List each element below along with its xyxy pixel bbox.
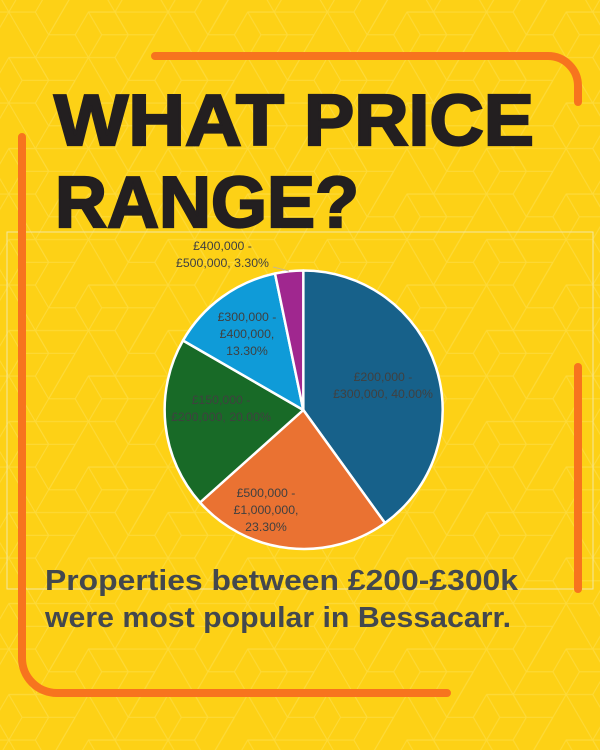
leader line: [273, 267, 289, 271]
title: RANGE?: [55, 163, 359, 243]
title: [54, 81, 534, 243]
slice: £150,000 - £200,000: [165, 340, 303, 502]
label: £400,000 - £500,000: £500,000, 3.30%: [176, 256, 269, 270]
label: £500,000 - £1,000,000: £500,000 -: [237, 486, 295, 500]
label: £500,000 - £1,000,000: £1,000,000,: [234, 503, 298, 517]
caption: [44, 565, 519, 634]
label: £400,000 - £500,000: £400,000 -: [193, 239, 252, 253]
orange frame: top right: [155, 56, 578, 102]
caption: were most popular in Bessacarr.: [44, 602, 511, 634]
orange frame: bottom left: [22, 137, 447, 693]
title: PRICE: [304, 81, 534, 161]
label: £150,000 - £200,000: £200,000, 20.00%: [171, 410, 271, 424]
slice: £300,000 - £400,000: [183, 274, 303, 410]
label: £200,000 - £300,000: £200,000 -: [354, 370, 412, 384]
label: £150,000 - £200,000: £150,000 -: [192, 393, 250, 407]
pie chart: [165, 270, 443, 549]
chart frame: [7, 232, 593, 589]
label: £300,000 - £400,000: 13.30%: [226, 344, 268, 358]
label: £300,000 - £400,000: £300,000 -: [218, 310, 276, 324]
slice: £200,000 - £300,000: [303, 270, 443, 523]
caption: Properties between £200-£300k: [45, 565, 519, 597]
title: WHAT: [54, 81, 284, 161]
slice: £400,000 - £500,000: [275, 270, 303, 410]
label: £500,000 - £1,000,000: 23.30%: [245, 520, 287, 534]
pie labels: [171, 239, 433, 534]
label: £300,000 - £400,000: £400,000,: [220, 327, 274, 341]
label: £200,000 - £300,000: £300,000, 40.00%: [333, 387, 433, 401]
slice: £500,000 - £1,000,000: [200, 410, 385, 549]
orange frame: right: [574, 367, 582, 589]
